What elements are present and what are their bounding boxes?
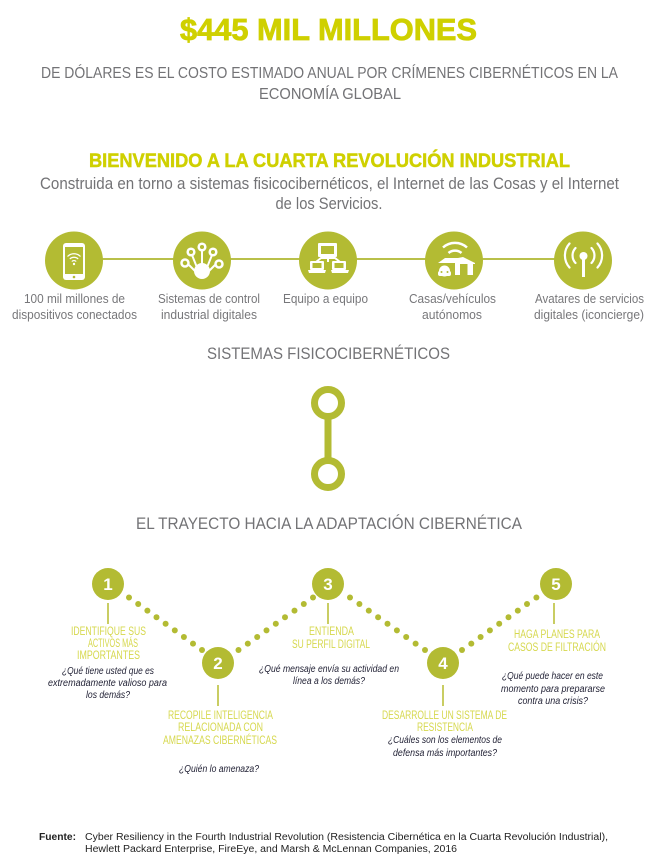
step 5 [501,568,606,707]
step 2 [163,647,277,775]
icon labels: autónomos [422,307,482,322]
step 1: extremadamente valioso para [48,678,167,689]
step 2: 2 [213,654,223,673]
step 3: ENTIENDA [309,626,354,638]
step 4: ¿Cuáles son los elementos de [388,735,502,746]
step 1: IMPORTANTES [77,650,140,662]
icon: connected home and car [425,232,483,290]
title: $445 MIL MILLONES [180,12,477,47]
step 5: HAGA PLANES PARA [514,629,600,641]
step 4 [382,647,507,759]
step 5: ¿Qué puede hacer en este [502,671,603,682]
source footnote: Hewlett Packard Enterprise, FireEye, and Marsh & McLennan Companies, 2016 [85,844,457,855]
icon: smartphone [45,232,103,290]
icon timeline [45,232,612,290]
intro text: Construida en torno a sistemas fisicocibernéticos, el Internet de las Cosas y el Internet [40,175,619,193]
icon labels: Equipo a equipo [283,291,368,306]
step 2: RECOPILE INTELIGENCIA [168,710,273,722]
step 5: contra una crisis? [518,696,588,707]
step 1: ¿Qué tiene usted que es [62,666,154,677]
icon labels: dispositivos conectados [12,307,137,322]
step 3: 3 [323,575,333,594]
heading: cuarta revolución industrial: BIENVENIDO A LA CUARTA REVOLUCIÓN INDUSTRIAL [89,148,570,172]
step 5: momento para prepararse [501,684,605,695]
step 3: ¿Qué mensaje envía su actividad en [259,664,399,675]
step 2: AMENAZAS CIBERNÉTICAS [163,734,277,747]
intro text: de los Servicios. [276,195,382,213]
icon: connector rings [314,390,342,488]
icon labels: digitales (iconcierge) [534,307,644,322]
step 4: RESISTENCIA [417,722,473,734]
icon labels: industrial digitales [161,307,257,322]
icon: industrial control [173,232,231,290]
icon labels: Avatares de servicios [535,291,644,306]
step 2: RELACIONADA CON [178,722,263,734]
icon: peer to peer network [299,232,357,290]
step 2: ¿Quién lo amenaza? [179,764,259,775]
step 1 [48,568,167,701]
icon labels: Casas/vehículos [409,291,496,306]
step 4: 4 [438,654,448,673]
step 5: 5 [551,575,561,594]
icon labels [12,291,644,322]
step 4: defensa más importantes? [393,748,497,759]
subtitle: ECONOMÍA GLOBAL [259,84,401,103]
source footnote: Cyber Resiliency in the Fourth Industrial Revolution (Resistencia Cibernética en la Cuarta Revolución Industrial), [85,832,608,843]
heading: trayecto: EL TRAYECTO HACIA LA ADAPTACIÓN CIBERNÉTICA [136,514,522,533]
step 3: SU PERFIL DIGITAL [292,639,370,651]
heading: sistemas fisicocibernéticos: SISTEMAS FISICOCIBERNÉTICOS [207,344,450,363]
step 3 [259,568,399,687]
source footnote: Fuente: [39,832,76,843]
step 1: IDENTIFIQUE SUS [71,626,146,638]
icon labels: 100 mil millones de [24,291,125,306]
step 1: 1 [103,575,113,594]
step 1: ACTIVOS MÁS [88,637,138,650]
zigzag dotted path [126,594,539,653]
step 4: DESARROLLE UN SISTEMA DE [382,710,507,722]
icon labels: Sistemas de control [158,291,260,306]
intro text [40,175,619,213]
icon: antenna [554,232,612,290]
source footnote [39,832,608,855]
subtitle [41,63,618,103]
step 3: línea a los demás? [293,676,365,687]
step 1: los demás? [86,690,130,701]
step 5: CASOS DE FILTRACIÓN [508,641,606,654]
